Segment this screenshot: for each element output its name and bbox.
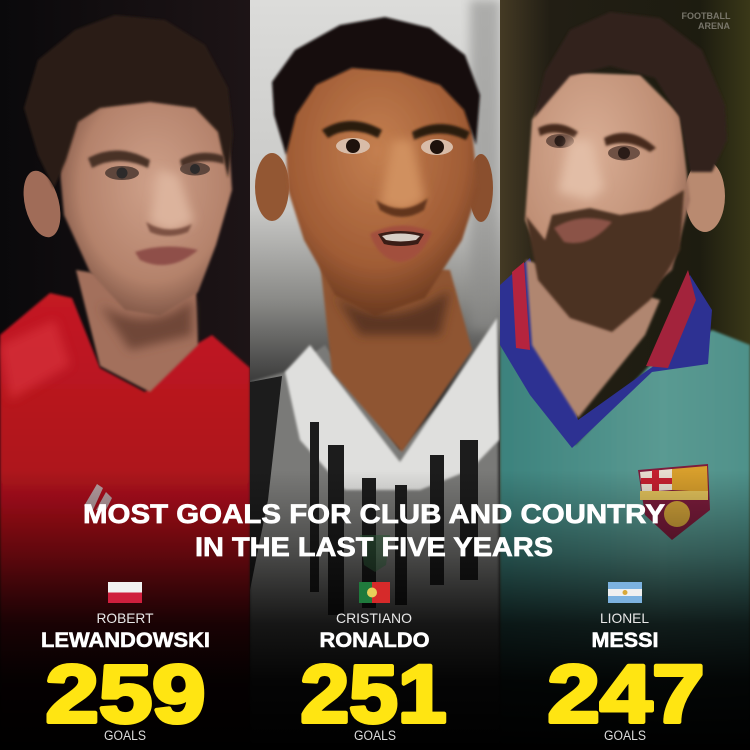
goals label: GOALS (354, 728, 396, 743)
adidas logo (84, 484, 112, 510)
watermark: Football Arena (682, 11, 731, 31)
Italian shield badge (360, 535, 390, 572)
jersey: white and black stripes (250, 345, 500, 650)
dark fade over the lower portraits (0, 470, 750, 750)
surname: LEWANDOWSKI (41, 629, 210, 652)
goal count: 247 (548, 649, 704, 740)
flag: Argentina (608, 582, 642, 603)
surname: RONALDO (320, 629, 430, 652)
mouth (370, 225, 432, 262)
face (285, 62, 478, 316)
title: MOST GOALS FOR CLUB AND COUNTRY (83, 499, 665, 529)
stat block: Messi (548, 582, 704, 743)
stat block: Ronaldo (300, 582, 446, 743)
flag: Poland (108, 582, 142, 603)
first name: LIONEL (600, 610, 649, 626)
watermark: Football Arena: ARENA (698, 21, 730, 31)
panel: Messi portrait (500, 0, 750, 674)
nose (150, 170, 194, 232)
eyes and brows (538, 124, 656, 160)
jersey: red shirt (0, 291, 250, 668)
eyes and brows (88, 150, 224, 180)
jersey collar: white V (285, 318, 499, 490)
mouth (554, 218, 612, 243)
goals label: GOALS (604, 728, 646, 743)
hair (24, 15, 233, 188)
flag: Portugal (359, 582, 390, 603)
jersey: teal shirt (500, 328, 750, 670)
title (83, 499, 665, 562)
nose (380, 140, 425, 212)
face (58, 90, 232, 316)
beard (526, 190, 684, 332)
goal count: 259 (46, 649, 206, 740)
surname: MESSI (592, 629, 658, 652)
panel: Ronaldo portrait (250, 0, 500, 670)
ear (685, 160, 725, 232)
goal count: 251 (300, 649, 446, 740)
title: IN THE LAST FIVE YEARS (195, 532, 553, 562)
hair (534, 12, 727, 172)
face (523, 72, 690, 280)
collar: navy and red (500, 258, 712, 448)
neck (320, 262, 472, 452)
ear (24, 170, 60, 238)
panel: Lewandowski portrait (0, 0, 250, 670)
stat block: Lewandowski (41, 582, 210, 743)
hair (272, 17, 480, 155)
nose (558, 140, 604, 200)
goals label: GOALS (104, 728, 146, 743)
neck (76, 270, 198, 392)
crest: FC Barcelona badge (638, 464, 710, 540)
first name: CRISTIANO (336, 610, 412, 626)
eyes and brows (322, 121, 470, 155)
mouth (135, 246, 198, 265)
watermark: Football Arena: FOOTBALL (682, 11, 731, 21)
ears (255, 153, 289, 221)
neck (526, 260, 660, 418)
first name: ROBERT (96, 610, 154, 626)
